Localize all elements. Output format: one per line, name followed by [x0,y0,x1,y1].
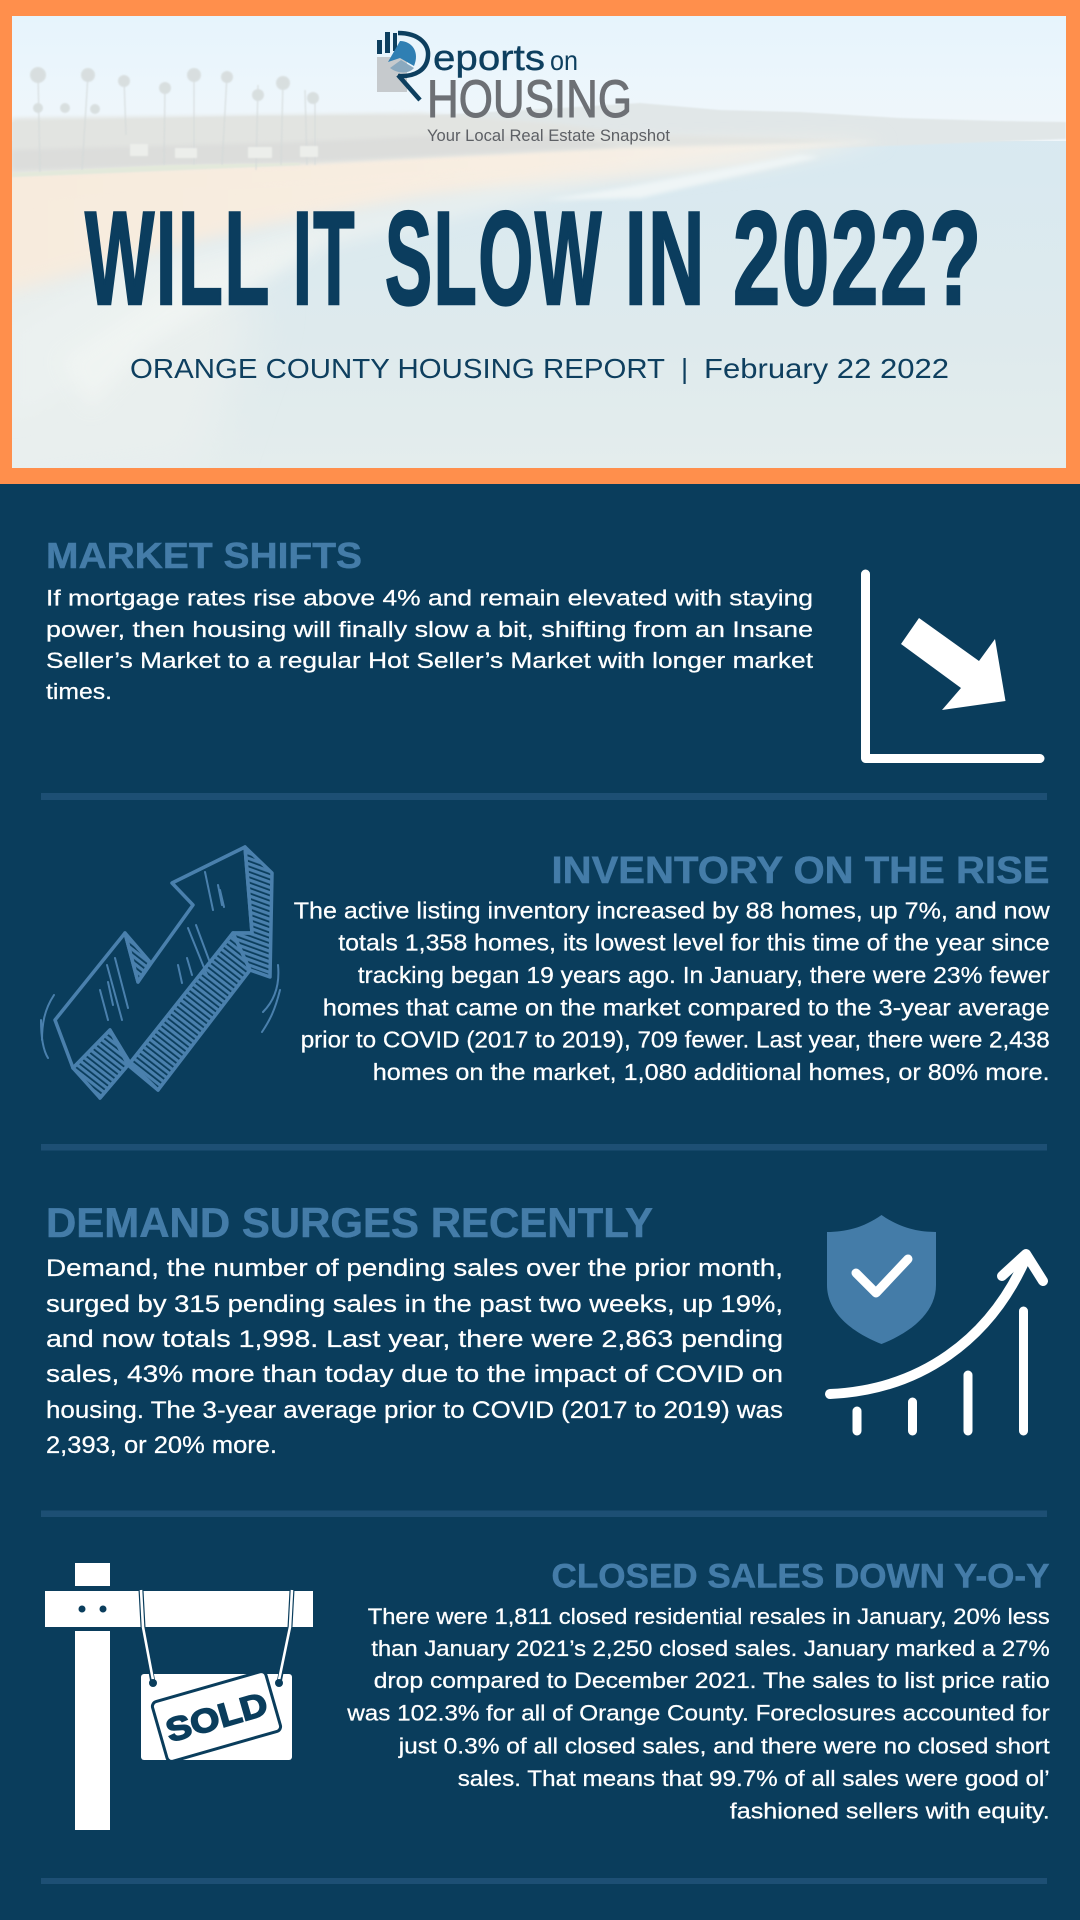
text block: inventory: tracking began 19 years ago. In January, there were 23% fewer [358,962,1050,988]
panel: closed sales [45,1558,1050,1830]
text block: closed sales: fashioned sellers with equity. [730,1798,1050,1824]
text block: closed sales: drop compared to December 2021. The sales to list price ratio [374,1668,1050,1693]
logo [377,32,670,145]
panel: demand surges [46,1199,1043,1459]
text block: closed sales: just 0.3% of all closed sales, and there were no closed short [398,1734,1050,1758]
icon: falling chart arrow [866,574,1040,758]
shield [827,1215,936,1344]
palm trees [30,67,319,172]
logo wordmark: eports [433,37,545,78]
icon: sketched up arrow [41,847,280,1098]
text block: market shifts: power, then housing will finally slow a bit, shifting from an Insane [46,617,813,642]
text block: demand: 2,393, or 20% more. [46,1432,277,1459]
growth curve [830,1254,1043,1431]
logo: Your Local Real Estate Snapshot [427,127,670,145]
subtitle [130,353,949,384]
logo: on [550,45,578,76]
icon: sold sign [45,1563,313,1830]
text block: closed sales: There were 1,811 closed residential resales in January, 20% less [368,1604,1050,1629]
text block: inventory: homes on the market, 1,080 additional homes, or 80% more. [373,1059,1050,1085]
text block: inventory: homes that came on the market compared to the 3-year average [323,994,1050,1020]
text block: market shifts: times. [46,679,112,704]
heading: closed sales: CLOSED SALES DOWN Y-O-Y [552,1558,1050,1596]
text block: demand: housing. The 3-year average prior to COVID (2017 to 2019) was [46,1397,783,1424]
text block: inventory: totals 1,358 homes, its lowest level for this time of the year since [338,930,1050,956]
icon: shield with growth chart [827,1215,1043,1431]
title: SLOW [385,185,603,333]
heading: market shifts: MARKET SHIFTS [46,535,362,576]
sold tag [151,1670,282,1763]
subtitle: February 22 2022 [704,353,949,384]
panel: market shifts [46,535,1040,758]
beach photo background [0,16,1066,500]
panel: inventory on the rise [41,847,1050,1098]
text block: demand [46,1255,783,1459]
title [85,185,983,333]
text block: market shifts: Seller’s Market to a regular Hot Seller’s Market with longer market [46,648,814,673]
title: WILL [85,185,271,333]
beachfront buildings [130,144,318,158]
heading: inventory: INVENTORY ON THE RISE [552,850,1050,892]
text block: closed sales [346,1604,1050,1824]
logo: HOUSING [427,70,632,129]
title: IN [625,185,706,333]
text block: closed sales: sales. That means that 99.7% of all sales were good ol’ [458,1766,1050,1791]
sold tag: SOLD [162,1685,272,1749]
header panel [0,0,1080,500]
text block: market shifts: If mortgage rates rise above 4% and remain elevated with staying [46,586,813,610]
text block: market shifts [46,586,814,704]
text block: inventory [294,898,1050,1085]
text block: demand: and now totals 1,998. Last year, there were 2,863 pending [46,1326,783,1353]
text block: demand: surged by 315 pending sales in the past two weeks, up 19%, [46,1291,783,1318]
text block: inventory: prior to COVID (2017 to 2019), 709 fewer. Last year, there were 2,438 [301,1026,1050,1052]
text block: demand: Demand, the number of pending sales over the prior month, [46,1255,783,1282]
subtitle: | [681,353,688,384]
text block: closed sales: was 102.3% for all of Orange County. Foreclosures accounted for [346,1700,1050,1726]
text block: closed sales: than January 2021’s 2,250 closed sales. January marked a 27% [371,1636,1050,1661]
heading: demand: DEMAND SURGES RECENTLY [46,1199,653,1246]
title: IT [293,185,356,333]
text block: inventory: The active listing inventory increased by 88 homes, up 7%, and now [294,898,1050,924]
logo mark [377,32,428,100]
subtitle: ORANGE COUNTY HOUSING REPORT [130,353,665,384]
text block: demand: sales, 43% more than today due to the impact of COVID on [46,1361,783,1388]
